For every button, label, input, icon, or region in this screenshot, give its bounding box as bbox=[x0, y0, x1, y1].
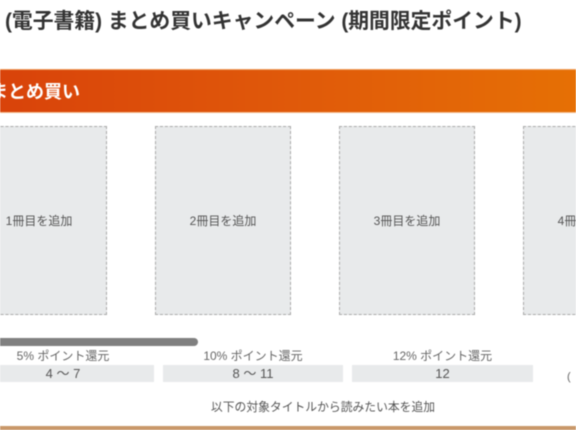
book slot 1 bbox=[0, 126, 107, 315]
tier range 8-11 bbox=[163, 365, 343, 382]
tier label 5%: 5% ポイント還元 bbox=[17, 349, 109, 363]
book slot 1: 1冊目を追加 bbox=[6, 214, 72, 228]
book slot 4 bbox=[523, 126, 576, 315]
tier label 12%: 12% ポイント還元 bbox=[393, 349, 492, 363]
book slot 3: 3冊目を追加 bbox=[374, 214, 440, 228]
tier label 10%: 10% ポイント還元 bbox=[203, 349, 303, 363]
book slot 3 bbox=[339, 126, 475, 315]
title: (電子書籍) まとめ買いキャンペーン (期間限定ポイント) bbox=[5, 10, 522, 33]
tier range 4-7 bbox=[0, 365, 154, 382]
orange section header bbox=[0, 69, 576, 113]
tier range 4-7: 4 ～ 7 bbox=[46, 366, 80, 381]
tier range 12 bbox=[352, 365, 533, 382]
tier range 8-11: 8 ～ 11 bbox=[233, 366, 273, 381]
instruction text: 以下の対象タイトルから読みたい本を追加 bbox=[211, 400, 435, 414]
tier range 12: 12 bbox=[435, 366, 450, 381]
progress bar bbox=[0, 338, 198, 346]
clipped note: ( bbox=[567, 371, 571, 383]
bottom strip bbox=[0, 426, 576, 430]
book slot 2 bbox=[155, 126, 291, 315]
book slot 2: 2冊目を追加 bbox=[190, 214, 256, 228]
